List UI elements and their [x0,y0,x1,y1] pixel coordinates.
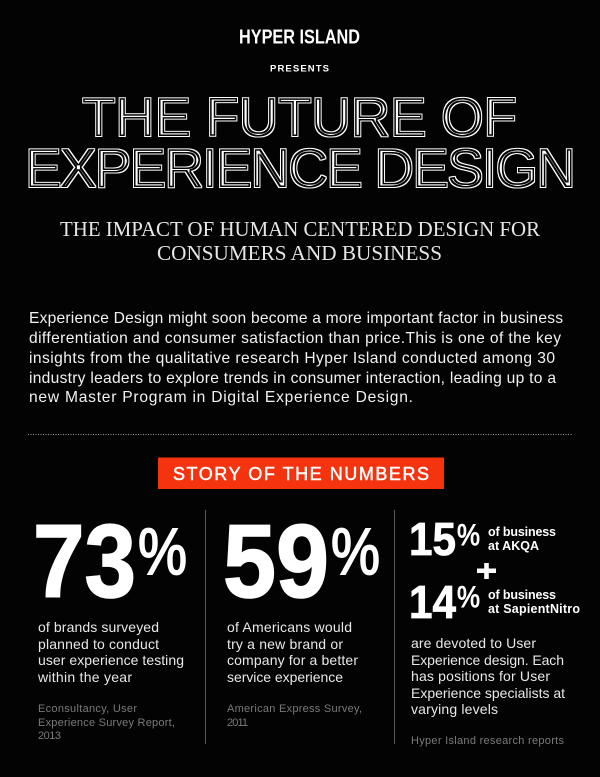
intro paragraph [29,310,563,406]
stat description: user experience testing [38,652,184,668]
intro paragraph: insights from the qualitative research Hyper Island conducted among 30 [29,350,555,367]
logo: Hyper Island: HYPER ISLAND [239,26,360,48]
stat description: service experience [227,669,343,685]
stat column: 73% [33,504,187,742]
stat number 14% at SapientNitro: at SapientNitro [488,602,580,616]
stat number 14% at SapientNitro: 14 [409,576,456,628]
stat description: planned to conduct [38,636,159,652]
stat description: varying levels [411,701,498,717]
title [25,86,576,199]
stat description: try a new brand or [227,636,343,652]
stat source: Econsultancy, User [38,703,137,715]
stat description [227,619,358,685]
stat number 73%: % [138,514,187,588]
stat number 73%: 73 [33,504,136,620]
stat description [411,635,565,717]
stat description: of brands surveyed [38,619,159,635]
stat number 14% at SapientNitro: of business [488,588,556,602]
stat source: 2011 [227,717,248,729]
banner: story of the numbers: STORY OF THE NUMBERS [173,464,429,484]
intro paragraph: differentiation and consumer satisfaction than price.This is one of the key [29,330,561,347]
stat source: Experience Survey Report, [38,717,175,729]
stat number 59%: % [331,514,380,588]
stat number 59%: 59 [223,504,329,620]
intro paragraph: industry leaders to explore trends in consumer interaction, leading up to a [29,370,556,387]
subtitle: CONSUMERS AND BUSINESS [157,241,442,265]
stat number 14% at SapientNitro [409,576,580,628]
icon: plus [477,563,496,579]
stat number 15% at AKQA: at AKQA [488,539,539,553]
intro paragraph: Experience Design might soon become a more important factor in business [29,310,563,327]
stat description: are devoted to User [411,635,536,651]
stat source: American Express Survey, [227,703,362,715]
subtitle: THE IMPACT OF HUMAN CENTERED DESIGN FOR [60,217,540,241]
stat number 15% at AKQA [409,513,556,565]
banner: story of the numbers [158,458,444,489]
stat description [37,619,184,685]
stat number 15% at AKQA: 15 [409,513,456,565]
stat description: of Americans would [227,619,352,635]
stat source [38,703,175,742]
intro paragraph: new Master Program in Digital Experience Design. [29,389,413,406]
stat column: 59% [223,504,380,729]
stat description: Experience design. Each [411,652,564,668]
subtitle [60,217,540,265]
stat source: 2013 [38,730,61,742]
stat number 15% at AKQA: % [457,519,480,552]
stat description: within the year [37,669,132,685]
stat number 14% at SapientNitro: % [457,581,480,614]
stat source [227,703,362,729]
presents label: PRESENTS [270,64,329,74]
title: EXPERIENCE DESIGN [25,137,576,199]
stat description: company for a better [227,652,358,668]
stat column: 15% + 14% [409,513,580,747]
stat source: Hyper Island research reports [411,735,564,747]
stat description: Experience specialists at [411,685,565,701]
stat description: has positions for User [411,668,550,684]
title: THE FUTURE OF [82,86,517,148]
stat number 15% at AKQA: of business [488,525,556,539]
